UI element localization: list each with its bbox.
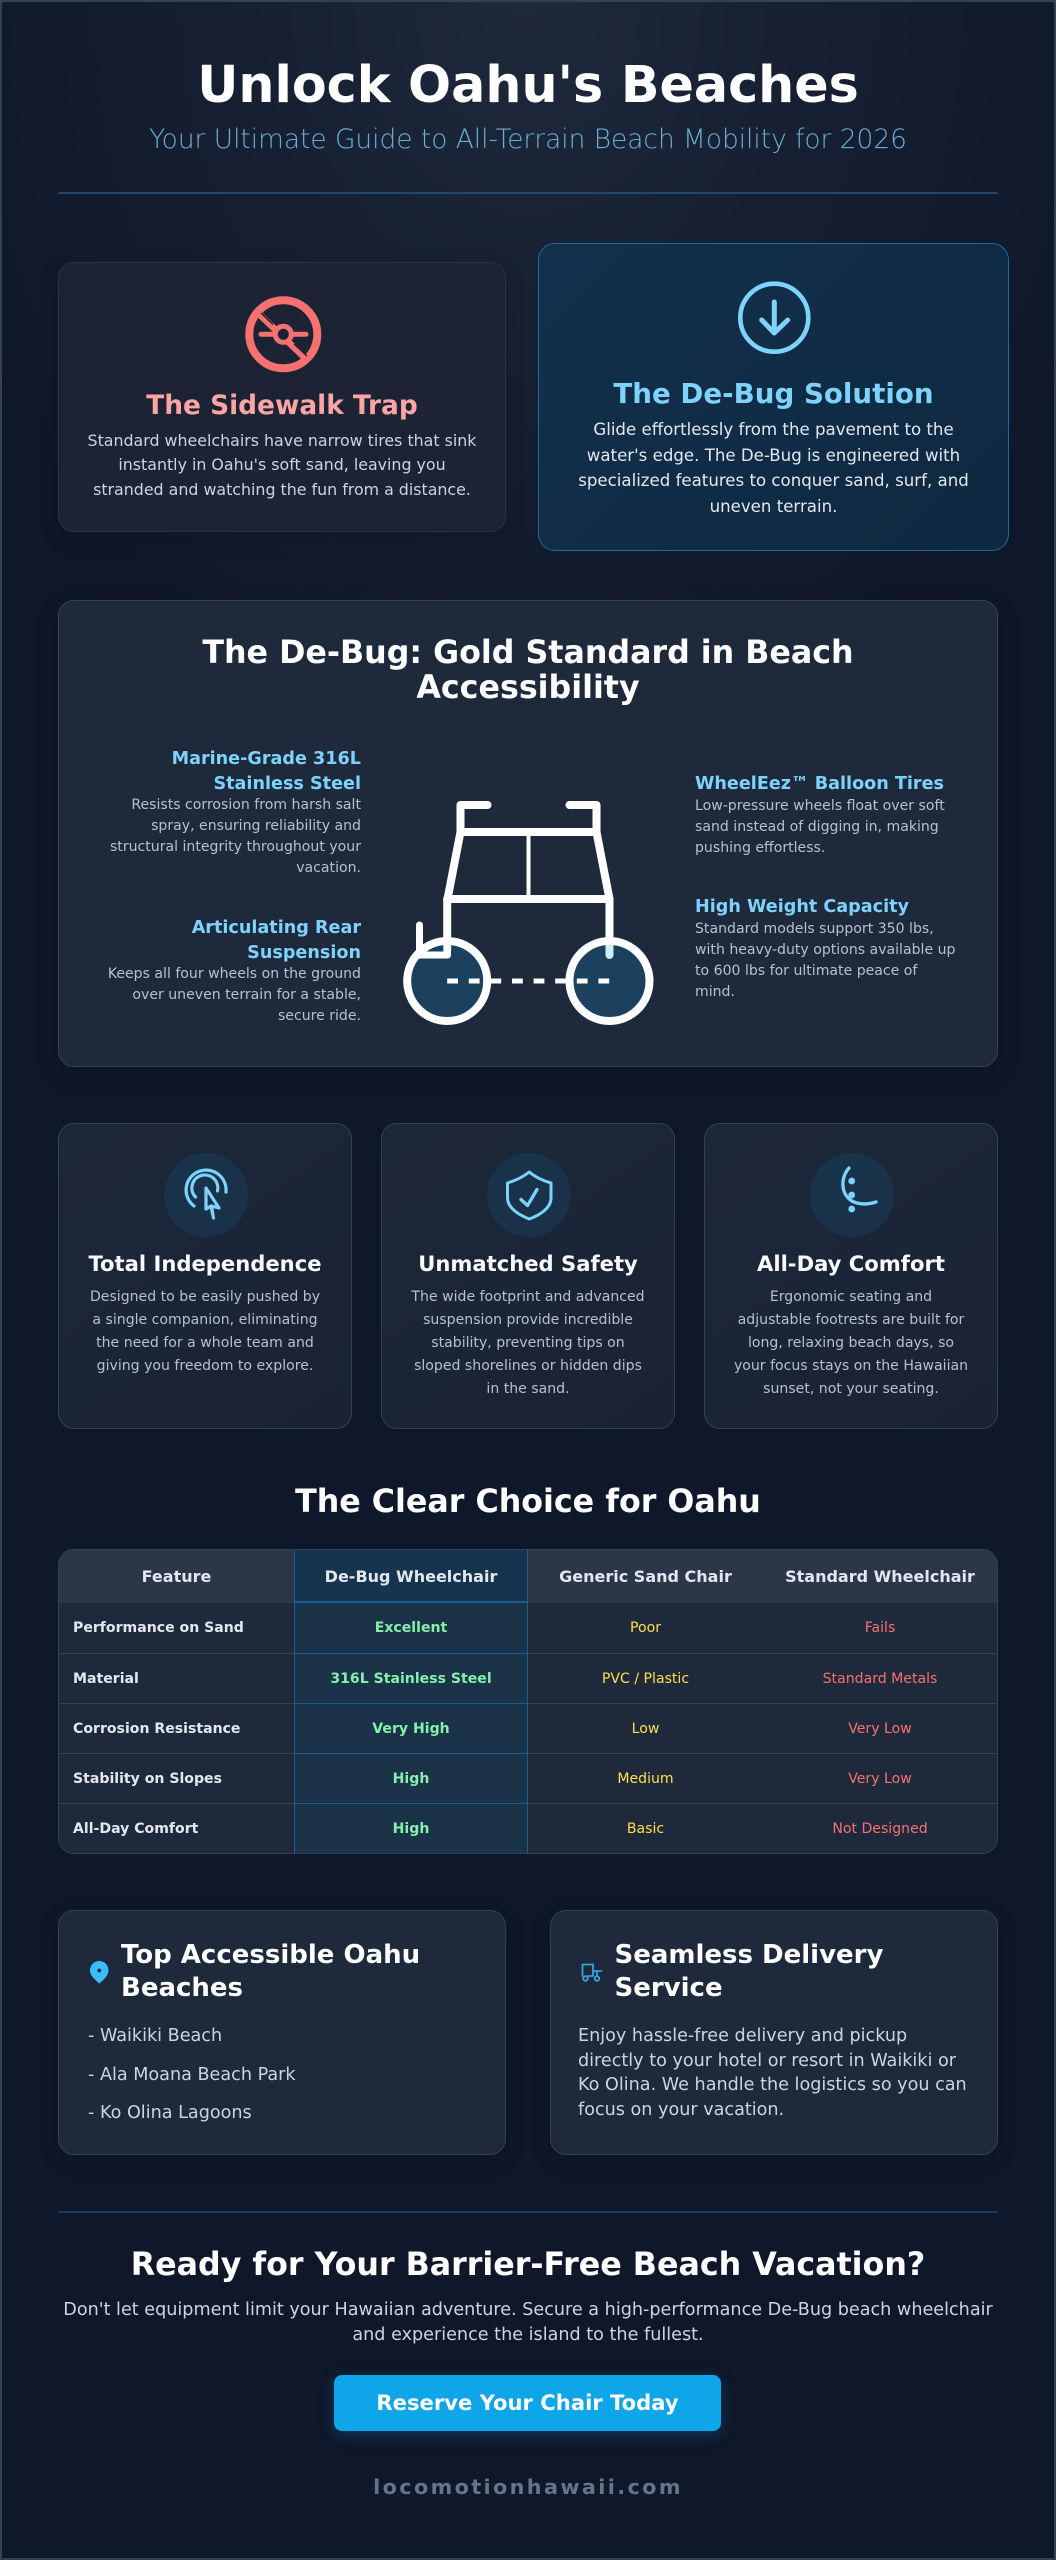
row: stability on slopes: High: [393, 1771, 429, 1787]
body text: the need for a whole team and: [96, 1335, 314, 1351]
body text: directly to your hotel or resort in Waikiki or: [578, 2051, 956, 2071]
row: all-day comfort: All-Day Comfort: [73, 1821, 198, 1837]
feature: rear suspension: Suspension: [247, 943, 361, 963]
heading: Unmatched Safety: [418, 1251, 638, 1276]
heading: [202, 635, 854, 706]
subtitle: Your Ultimate Guide to All-Terrain Beach Mobility for 2026: [149, 124, 907, 155]
row: corrosion resistance: [59, 1703, 997, 1753]
row: material: Standard Metals: [823, 1671, 937, 1687]
call to action text: [63, 2300, 993, 2345]
panel: all-day comfort: [704, 1123, 998, 1429]
beach list: - Ala Moana Beach Park: [88, 2065, 296, 2085]
feature: marine-grade steel: [110, 749, 362, 876]
heading: [614, 1940, 883, 2002]
comparison heading: The Clear Choice for Oahu: [295, 1484, 761, 1520]
panel: unmatched safety: [381, 1123, 675, 1429]
row: performance on sand: [73, 1603, 895, 1653]
body text: adjustable footrests are built for: [738, 1312, 964, 1328]
body text: focus on your vacation.: [578, 2100, 784, 2120]
body text: The wide footprint and advanced: [411, 1289, 645, 1305]
heading: Top Accessible Oahu: [121, 1940, 420, 1970]
row: all-day comfort: High: [393, 1821, 429, 1837]
body text: Ergonomic seating and: [770, 1289, 932, 1305]
reserve button: [334, 2375, 721, 2431]
body text: [411, 1289, 645, 1397]
feature: balloon tires: pushing effortless.: [695, 840, 825, 856]
feature: marine-grade steel: Marine-Grade 316L: [172, 749, 361, 769]
heading: Total Independence: [88, 1251, 322, 1276]
row: performance on sand: Excellent: [375, 1620, 447, 1636]
feature: weight capacity: High Weight Capacity: [695, 897, 909, 917]
body text: in the sand.: [486, 1381, 570, 1397]
feature: balloon tires: sand instead of digging in, making: [695, 819, 939, 835]
heading: The Sidewalk Trap: [146, 390, 418, 421]
body text: your focus stays on the Hawaiian: [734, 1358, 968, 1374]
body text: Enjoy hassle-free delivery and pickup: [578, 2026, 907, 2046]
heading: [121, 1940, 420, 2002]
table header: [59, 1550, 997, 1603]
heading: All-Day Comfort: [757, 1251, 945, 1276]
heading: The De-Bug Solution: [613, 377, 934, 410]
website footer: locomotionhawaii.com: [373, 2475, 683, 2499]
beach list: - Waikiki Beach: [88, 2026, 222, 2046]
feature: balloon tires: Low-pressure wheels float over soft: [695, 798, 945, 814]
row: corrosion resistance: Very High: [372, 1721, 450, 1737]
body text: [734, 1289, 968, 1397]
body text: uneven terrain.: [710, 497, 837, 516]
feature: rear suspension: [108, 918, 361, 1024]
row: material: 316L Stainless Steel: [330, 1671, 492, 1687]
row: material: Material: [73, 1671, 139, 1687]
icon: shield check: [487, 1153, 571, 1237]
panel: gold standard features: [58, 600, 998, 1067]
feature: weight capacity: to 600 lbs for ultimate peace of: [695, 963, 917, 979]
feature: balloon tires: [695, 774, 945, 856]
feature: marine-grade steel: spray, ensuring reliability and: [151, 818, 361, 834]
row: performance on sand: Poor: [630, 1620, 661, 1636]
body text: specialized features to conquer sand, surf, and: [578, 471, 969, 490]
heading: The De-Bug: Gold Standard in Beach: [202, 635, 854, 671]
feature: rear suspension: over uneven terrain for a stable,: [132, 987, 361, 1003]
title: Unlock Oahu's Beaches: [197, 55, 859, 114]
table header: De-Bug Wheelchair: [325, 1567, 497, 1586]
panel: the sidewalk trap: [58, 262, 506, 532]
call to action heading: Ready for Your Barrier-Free Beach Vacation?: [131, 2247, 925, 2283]
icon: arrow down circle: [738, 281, 811, 354]
body text: stranded and watching the fun from a distance.: [93, 480, 471, 499]
panel: top accessible beaches: [58, 1910, 506, 2155]
icon: reclined seat: [810, 1153, 894, 1237]
row: performance on sand: Fails: [865, 1620, 895, 1636]
body text: stability, preventing tips on: [431, 1335, 625, 1351]
table header: Feature: [142, 1567, 211, 1586]
row: corrosion resistance: Corrosion Resistance: [73, 1721, 240, 1737]
reserve button: Reserve Your Chair Today: [376, 2390, 679, 2415]
body text: sloped shorelines or hidden dips: [414, 1358, 642, 1374]
illustration: beach wheelchair: [403, 801, 654, 1025]
panel: delivery service: [550, 1910, 998, 2155]
icon: no sidewalk: [245, 296, 322, 372]
body text: suspension provide incredible: [423, 1312, 633, 1328]
row: stability on slopes: Stability on Slopes: [73, 1771, 222, 1787]
body text: long, relaxing beach days, so: [748, 1335, 954, 1351]
feature: marine-grade steel: Stainless Steel: [213, 774, 361, 794]
table header: Generic Sand Chair: [559, 1567, 732, 1586]
call to action text: Don't let equipment limit your Hawaiian adventure. Secure a high-performance De-Bug beach wheelchair: [63, 2300, 993, 2320]
feature: rear suspension: Articulating Rear: [192, 918, 361, 938]
feature: weight capacity: mind.: [695, 984, 735, 1000]
row: stability on slopes: [59, 1753, 997, 1803]
body text: Designed to be easily pushed by: [90, 1289, 320, 1305]
heading: Beaches: [121, 1972, 243, 2002]
call to action text: and experience the island to the fullest.: [352, 2325, 704, 2345]
body text: [578, 2026, 967, 2120]
heading: Seamless Delivery: [614, 1940, 883, 1970]
row: all-day comfort: Basic: [627, 1821, 664, 1837]
body text: sunset, not your seating.: [763, 1381, 939, 1397]
highlighted de-bug column: [294, 1550, 528, 1855]
feature: weight capacity: with heavy-duty options available up: [695, 942, 955, 958]
icon: delivery truck: [582, 1964, 602, 1982]
body text: instantly in Oahu's soft sand, leaving you: [118, 455, 446, 474]
icon: tap cursor: [164, 1153, 248, 1237]
heading: Accessibility: [416, 670, 640, 706]
feature: weight capacity: Standard models support 350 lbs,: [695, 921, 934, 937]
beach list: - Ko Olina Lagoons: [88, 2103, 252, 2123]
body text: [578, 420, 969, 516]
row: stability on slopes: Very Low: [848, 1771, 912, 1787]
body text: Standard wheelchairs have narrow tires that sink: [88, 431, 476, 450]
feature: rear suspension: Keeps all four wheels on the ground: [108, 966, 361, 982]
feature: marine-grade steel: structural integrity throughout your: [110, 839, 361, 855]
row: corrosion resistance: Very Low: [848, 1721, 912, 1737]
panel: total independence: [58, 1123, 352, 1429]
icon: map pin: [90, 1961, 108, 1984]
body text: Glide effortlessly from the pavement to the: [593, 420, 954, 439]
row: corrosion resistance: Low: [632, 1721, 659, 1737]
feature: marine-grade steel: vacation.: [296, 860, 361, 876]
body text: [88, 431, 476, 499]
body text: [90, 1289, 320, 1374]
heading: Service: [614, 1972, 723, 2002]
body text: a single companion, eliminating: [92, 1312, 318, 1328]
panel: the de-bug solution: [538, 243, 1009, 551]
table header: Standard Wheelchair: [785, 1567, 975, 1586]
feature: balloon tires: WheelEez™ Balloon Tires: [695, 774, 944, 794]
row: all-day comfort: Not Designed: [832, 1821, 928, 1837]
feature: marine-grade steel: Resists corrosion from harsh salt: [131, 797, 361, 813]
body text: giving you freedom to explore.: [97, 1358, 313, 1374]
row: stability on slopes: Medium: [617, 1771, 674, 1787]
row: all-day comfort: [59, 1803, 997, 1853]
body text: Ko Olina. We handle the logistics so you can: [578, 2075, 967, 2095]
row: performance on sand: Performance on Sand: [73, 1620, 244, 1636]
feature: rear suspension: secure ride.: [278, 1008, 361, 1024]
body text: water's edge. The De-Bug is engineered with: [587, 446, 960, 465]
row: material: PVC / Plastic: [602, 1671, 689, 1687]
comparison table: [58, 1549, 998, 1854]
beach list: [88, 2026, 296, 2123]
row: material: [59, 1653, 997, 1703]
feature: weight capacity: [695, 897, 955, 1000]
